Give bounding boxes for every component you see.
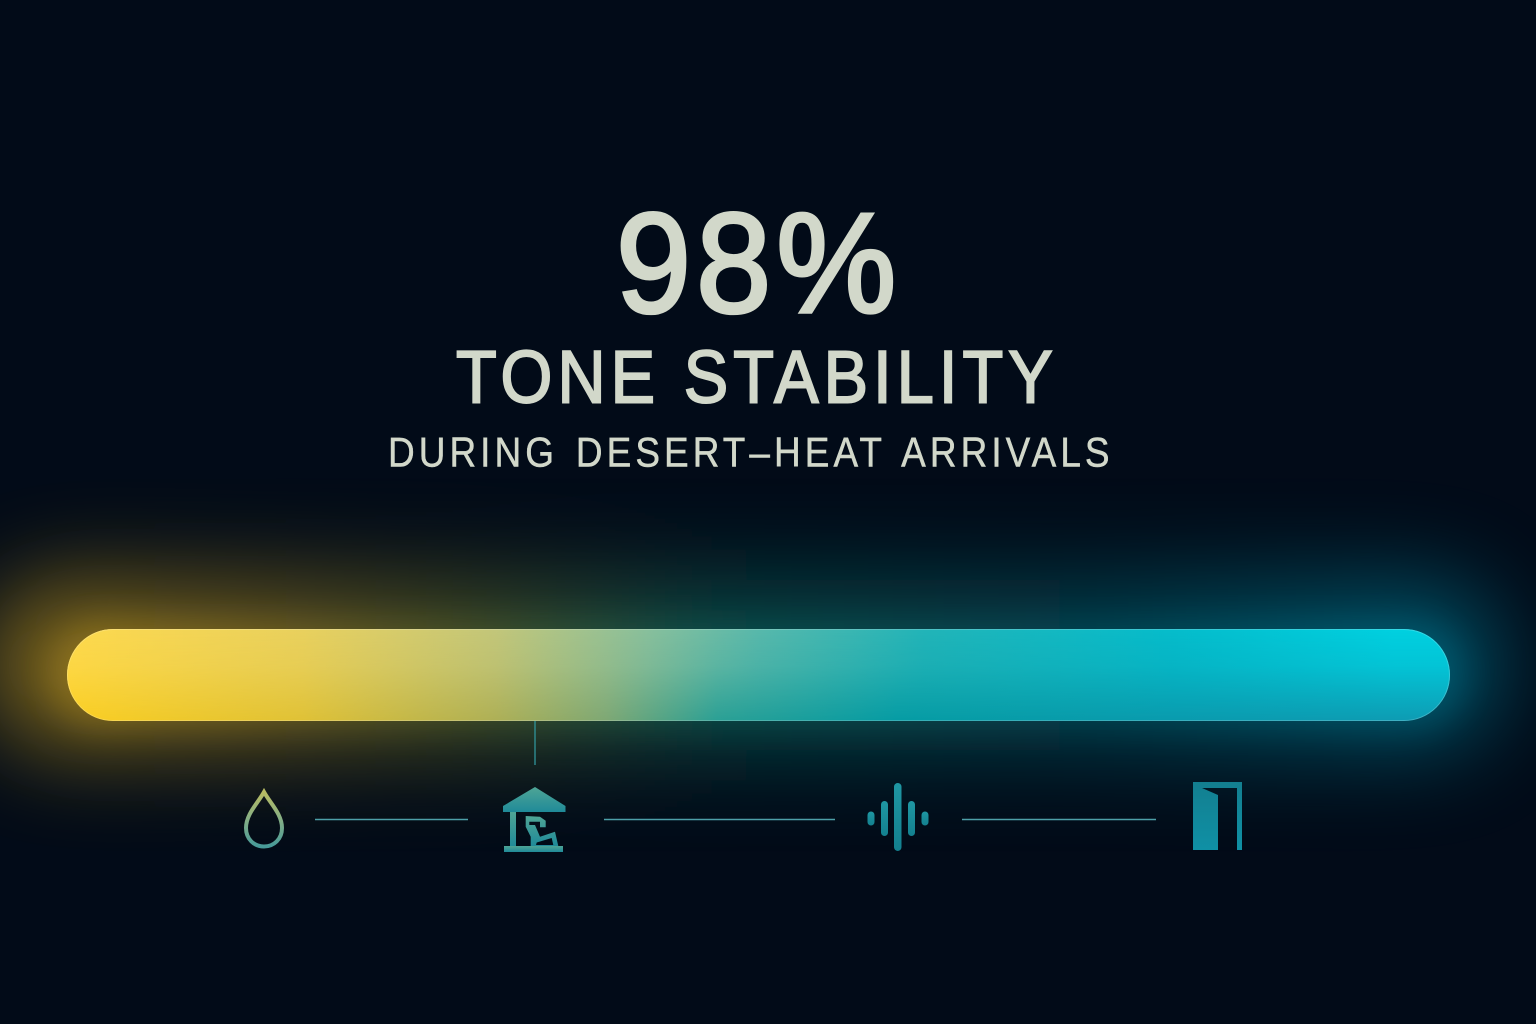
gradient progress bar xyxy=(67,629,1450,721)
connector: bar to building icon xyxy=(534,721,536,765)
infographic canvas xyxy=(0,211,1536,852)
headline stat: 98%: 98% xyxy=(616,185,896,343)
icon: water drop xyxy=(246,792,282,846)
connector: drop to building xyxy=(315,818,468,820)
icon: building with machine xyxy=(503,787,566,852)
icon: open door xyxy=(1193,782,1242,850)
heading: tone stability: TONE STABILITY xyxy=(456,335,1053,418)
bar glow xyxy=(0,580,1500,750)
icon: sound wave xyxy=(868,783,928,851)
connector: sound to door xyxy=(962,818,1156,820)
connector: building to sound xyxy=(604,818,835,820)
subheading: during desert-heat arrivals: DURING DESERT–HEAT ARRIVALS xyxy=(388,429,1110,476)
